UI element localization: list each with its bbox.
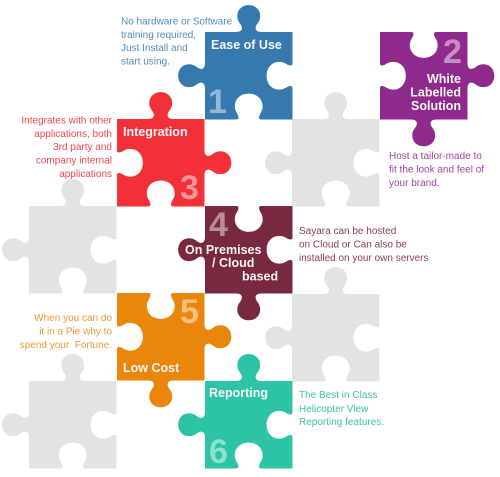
description: Ease of Use: start using. — [121, 56, 170, 68]
description: Low Cost: it in a Pie why to — [39, 326, 112, 338]
heading: On Premises / Cloud based: based — [242, 270, 278, 284]
description: On Premises / Cloud based: on Cloud or Can also be — [299, 240, 407, 250]
gray puzzle piece: middle left — [2, 179, 116, 293]
gray puzzle piece: upper right — [265, 92, 379, 206]
panel: 1 Ease of Use — [121, 5, 292, 121]
number 1: 1 — [208, 83, 227, 121]
heading: White Labelled Solution: White — [427, 72, 461, 86]
description: On Premises / Cloud based: installed on your own servers — [299, 253, 429, 264]
red puzzle piece — [117, 92, 231, 206]
description: Integration: applications — [59, 169, 112, 180]
purple puzzle piece — [380, 32, 494, 146]
number 6: 6 — [209, 433, 228, 471]
panel: 5 Low Cost — [20, 293, 231, 407]
heading: On Premises / Cloud based: / Cloud — [212, 256, 254, 270]
orange puzzle piece — [117, 293, 231, 407]
heading: White Labelled Solution: Labelled — [410, 86, 461, 100]
gray puzzle piece: lower left — [2, 354, 116, 468]
heading: Integration: Integration — [123, 125, 188, 139]
heading: Ease of Use: Ease of Use — [211, 38, 282, 52]
maroon puzzle piece — [178, 206, 292, 320]
number 4: 4 — [209, 206, 228, 244]
description: Low Cost: When you can do — [34, 313, 112, 324]
description: Ease of Use: Just Install and — [121, 43, 188, 54]
description: On Premises / Cloud based: Sayara can be hosted — [299, 226, 396, 237]
description: Integration: applications, both — [34, 129, 112, 140]
heading: Reporting: Reporting — [209, 386, 268, 400]
panel: 6 Reporting — [178, 354, 384, 471]
number 5: 5 — [180, 293, 199, 331]
description: Integration: company internal — [36, 156, 112, 166]
heading: On Premises / Cloud based: On Premises — [185, 243, 261, 257]
teal puzzle piece — [178, 354, 292, 468]
description: Integration: 3rd party and — [53, 142, 112, 153]
number 3: 3 — [180, 169, 199, 207]
blue puzzle piece — [178, 5, 292, 119]
description: Low Cost: spend your Fortune. — [20, 340, 112, 351]
heading: White Labelled Solution: Solution — [411, 99, 461, 113]
description: Reporting: Helicopter View — [299, 404, 369, 415]
description: White Labelled Solution: fit the look and feel of — [389, 164, 484, 176]
number 2: 2 — [443, 33, 462, 71]
description: White Labelled Solution: Host a tailor-made to — [389, 151, 482, 162]
panel: 3 Integration — [21, 92, 231, 207]
heading: Low Cost: Low Cost — [123, 361, 180, 375]
description: Reporting: The Best in Class — [299, 390, 377, 401]
description: Reporting: Reporting features. — [299, 417, 384, 428]
description: Integration: Integrates with other — [21, 116, 113, 126]
panel: 4 On Premises / Cloud based — [178, 206, 429, 320]
description: Ease of Use: training required, — [121, 30, 196, 41]
panel: 2 White Labelled Solution — [380, 32, 494, 189]
gray puzzle piece: lower right — [265, 267, 379, 381]
description: White Labelled Solution: your brand. — [389, 178, 440, 189]
description: Ease of Use: No hardware or Software — [121, 16, 233, 28]
